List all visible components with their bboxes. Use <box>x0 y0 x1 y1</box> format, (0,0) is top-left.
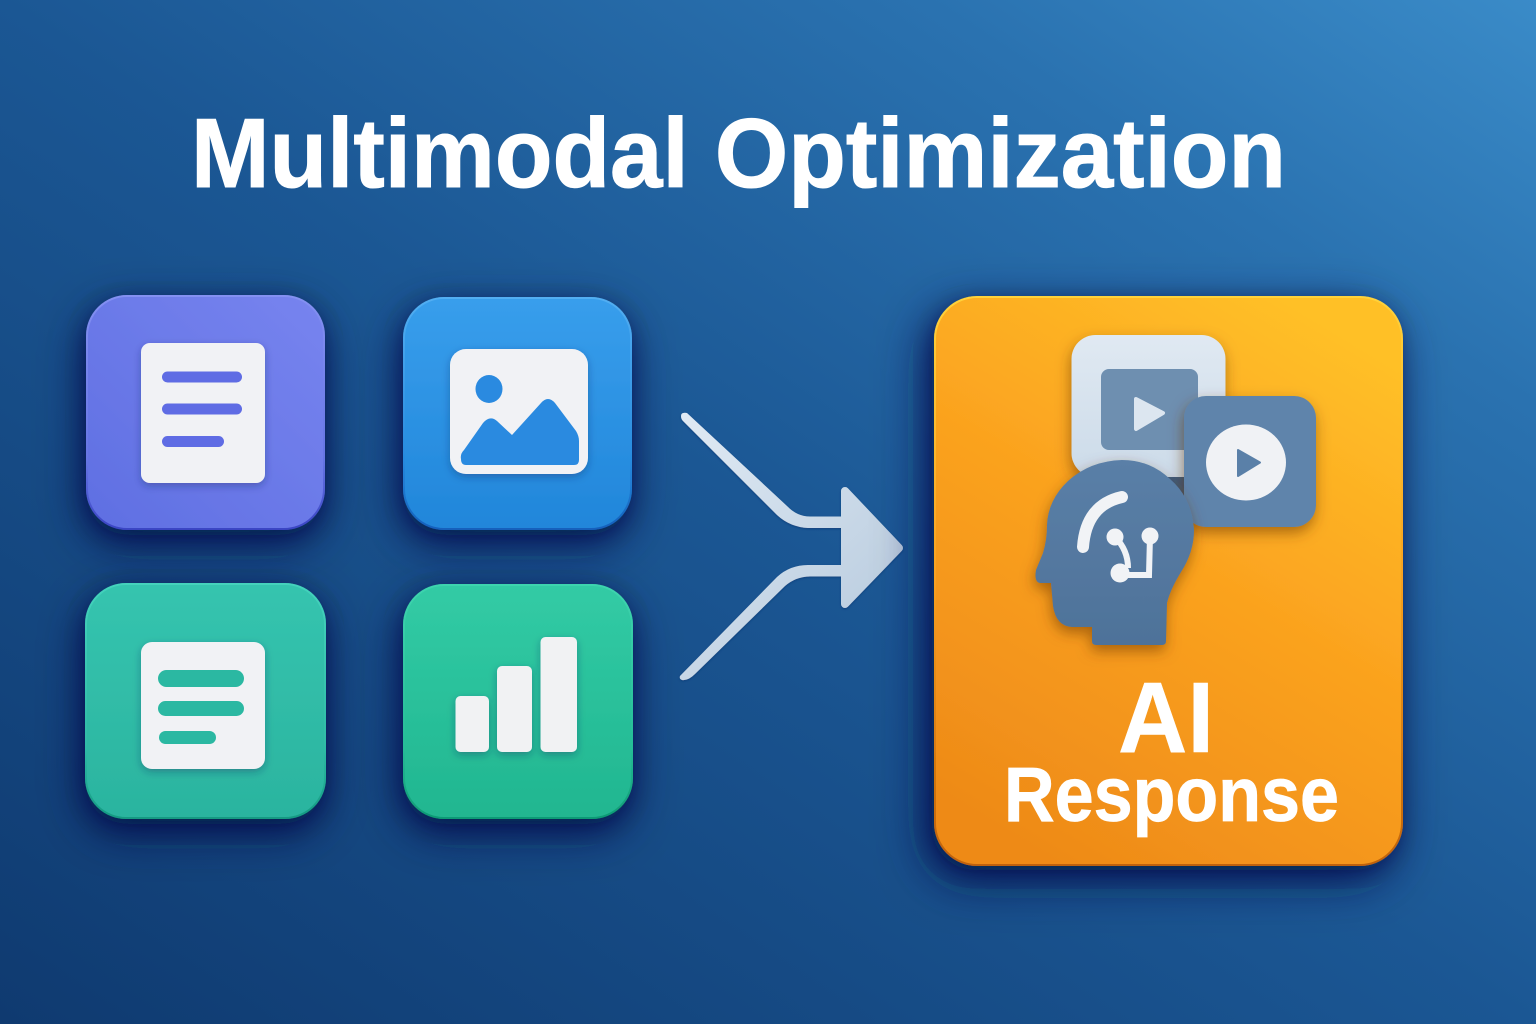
heading: Response: Response <box>1004 752 1339 838</box>
panel: text document tile <box>87 296 324 529</box>
icon: circuit nodes <box>1106 528 1158 582</box>
panel: AI response card <box>935 297 1402 865</box>
icon: summary document <box>141 642 265 769</box>
icon: bar chart <box>456 637 577 752</box>
heading: AI: AI <box>1118 662 1214 774</box>
icon: neural arc <box>1083 497 1122 547</box>
icon: video card <box>1072 335 1226 525</box>
arrow: two inputs merging <box>680 413 899 680</box>
icon: picture <box>450 349 588 474</box>
panel: chart tile <box>404 585 632 818</box>
icon: document <box>141 343 265 483</box>
panel: text summary tile <box>86 584 325 818</box>
icon: play button card <box>1184 396 1316 527</box>
title: Multimodal Optimization <box>191 98 1286 208</box>
panel: image tile <box>404 298 631 529</box>
icon: AI head <box>1036 460 1194 645</box>
